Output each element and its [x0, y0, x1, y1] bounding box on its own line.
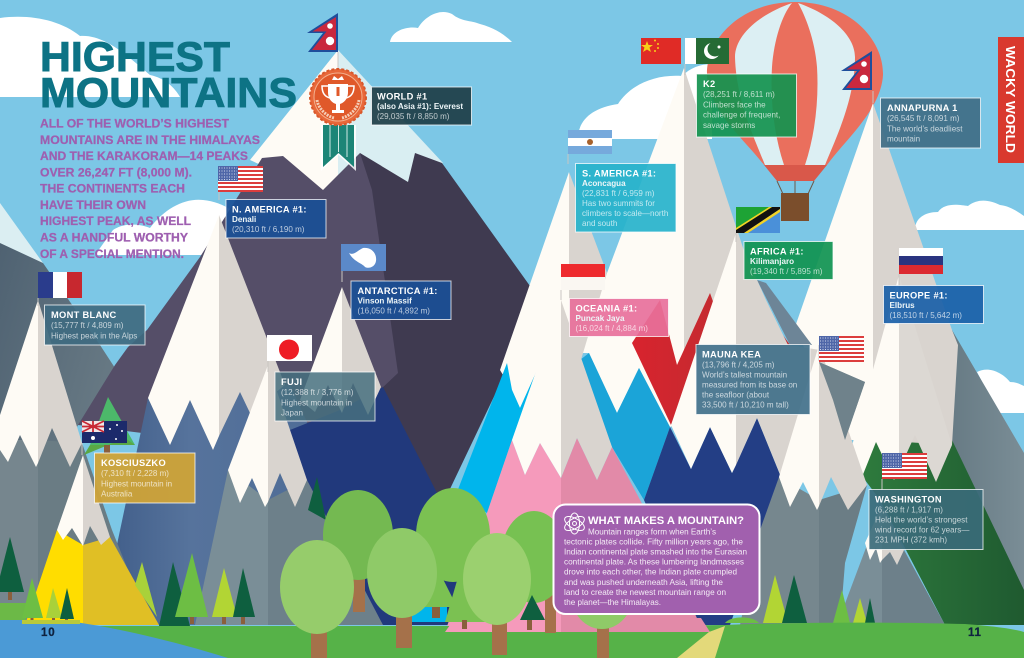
intro text: OVER 26,247 FT (8,000 M). — [40, 166, 192, 180]
icon: trophy medal — [310, 69, 366, 171]
label: K2 — [696, 74, 796, 137]
mountain: Mont Blanc — [0, 300, 150, 625]
label: K2: Climbers face the — [703, 100, 766, 110]
flag poles — [38, 52, 899, 490]
callout: what makes a mountain: continental plate. As these lumbering landmasses — [564, 556, 745, 566]
round trees — [280, 488, 632, 658]
label: Africa Kilimanjaro — [744, 242, 833, 280]
flag: Nepal (Everest) — [307, 13, 338, 52]
label: Kosciuszko — [94, 453, 195, 503]
label: Washington — [869, 490, 983, 550]
label: Africa Kilimanjaro: AFRICA #1: — [750, 246, 804, 256]
label: North America Denali — [226, 200, 326, 238]
label: Washington: 231 MPH (372 kmh) — [875, 536, 947, 544]
label: Kosciuszko: KOSCIUSZKO — [101, 458, 166, 468]
label: Antarctica Vinson Massif: (16,050 ft / 4,892 m) — [358, 306, 430, 316]
label: Oceania Puncak Jaya: OCEANIA #1: — [576, 304, 637, 314]
small tree behind flag — [84, 397, 135, 455]
trees left — [0, 477, 326, 626]
intro text: THE CONTINENTS EACH — [40, 182, 185, 196]
clouds — [0, 12, 1024, 413]
label: Antarctica Vinson Massif: ANTARCTICA #1: — [358, 286, 438, 296]
flag: Pakistan — [685, 38, 729, 64]
label: Europe Elbrus: EUROPE #1: — [890, 290, 948, 300]
label: Washington: Held the world’s strongest — [875, 516, 968, 524]
label: Kosciuszko: Australia — [101, 490, 133, 498]
label: Mauna Kea: 33,500 ft / 10,210 m tall) — [702, 400, 789, 410]
label: K2: challenge of frequent, — [703, 110, 780, 120]
mountain: Aconcagua — [457, 172, 607, 513]
title — [40, 33, 297, 116]
label: South America Aconcagua: (22,831 ft / 6,959 m) — [582, 189, 655, 198]
label: Mont Blanc: Highest peak in the Alps — [51, 332, 137, 340]
label: South America Aconcagua: S. AMERICA #1: — [582, 168, 656, 178]
mountain: Elbrus — [850, 275, 952, 482]
flag: Indonesia — [561, 264, 605, 290]
mountain: Kilimanjaro — [644, 233, 820, 625]
title: MOUNTAINS — [40, 69, 297, 116]
label: Mauna Kea: MAUNA KEA — [702, 350, 761, 360]
mountain: Puncak Jaya — [445, 300, 710, 632]
side tab: wacky world — [998, 37, 1024, 163]
hot air balloon — [707, 2, 883, 221]
mountain: Mauna Kea — [740, 345, 867, 625]
label: Europe Elbrus: Elbrus — [890, 301, 915, 310]
label: North America Denali: N. AMERICA #1: — [232, 204, 307, 214]
intro text: MOUNTAINS ARE IN THE HIMALAYAS — [40, 133, 260, 147]
label: South America Aconcagua: Has two summits for — [582, 199, 655, 208]
label: Africa Kilimanjaro: Kilimanjaro — [750, 257, 794, 266]
flag: Russia — [899, 248, 943, 274]
label: Mont Blanc — [44, 305, 145, 345]
mountain: Washington — [837, 505, 945, 625]
gray sliver and red peaks — [632, 280, 812, 425]
page number 10: 10 — [41, 627, 55, 639]
label: Annapurna: ANNAPURNA 1 — [887, 103, 958, 113]
callout: what makes a mountain: Indian continental plate smashed into the Eurasian — [564, 546, 747, 556]
label: world number one Everest: WORLD #1 — [377, 91, 427, 101]
callout: what makes a mountain: WHAT MAKES A MOUNTAIN? — [588, 515, 744, 527]
intro text: AS A HANDFUL WORTHY — [40, 230, 188, 244]
label: Fuji: Japan — [281, 408, 303, 418]
label: Oceania Puncak Jaya: Puncak Jaya — [576, 314, 625, 323]
label: Washington: WASHINGTON — [875, 494, 942, 504]
intro text: AND THE KARAKORAM—14 PEAKS — [40, 149, 248, 163]
flag: France — [38, 272, 82, 298]
label: South America Aconcagua: and south — [582, 219, 617, 228]
label: Annapurna: The world’s deadliest — [887, 124, 963, 134]
label: Mauna Kea: (13,796 ft / 4,205 m) — [702, 360, 775, 370]
label: Europe Elbrus: (18,510 ft / 5,642 m) — [890, 311, 962, 320]
mountain: Fuji — [195, 365, 383, 625]
page number 11: 11 — [968, 627, 982, 639]
label: Washington: wind record for 62 years— — [874, 526, 970, 534]
label: Kosciuszko: Highest mountain in — [101, 480, 172, 488]
label: Europe Elbrus — [884, 286, 984, 324]
flag: Tanzania — [736, 207, 780, 233]
icon: atom — [562, 513, 587, 534]
mountain: right gray and green range — [850, 330, 1024, 625]
label: South America Aconcagua — [576, 164, 676, 232]
callout: what makes a mountain: the planet—the Himalayas. — [564, 597, 661, 607]
callout: what makes a mountain — [554, 504, 760, 614]
callout: what makes a mountain: Mountain ranges form when Earth’s — [588, 526, 717, 536]
label: Fuji: Highest mountain in — [281, 398, 352, 408]
callout: what makes a mountain: tectonic plates collide. Fifty million years ago, the — [564, 536, 743, 546]
label: Mauna Kea: measured from its base on — [702, 380, 797, 390]
label: Kosciuszko: (7,310 ft / 2,228 m) — [101, 469, 169, 478]
label: world number one Everest: (also Asia #1): Everest — [377, 102, 463, 111]
label: Fuji: FUJI — [281, 377, 302, 387]
label: North America Denali: Denali — [232, 215, 256, 224]
label: South America Aconcagua: climbers to scale—north — [582, 209, 668, 218]
mountain: Annapurna — [795, 103, 958, 445]
title: HIGHEST — [40, 33, 230, 80]
ground — [0, 618, 1024, 658]
label: world number one Everest: (29,035 ft / 8,850 m) — [377, 112, 450, 121]
mountain: K2 — [577, 68, 770, 500]
flag: Japan — [267, 335, 312, 361]
label: Annapurna — [880, 98, 980, 148]
flag: USA (Mauna Kea) — [819, 336, 864, 362]
callout: what makes a mountain: land to create the newest mountain range on — [564, 587, 726, 597]
label: Antarctica Vinson Massif: Vinson Massif — [358, 296, 412, 306]
label: world number one Everest — [372, 87, 472, 125]
label: South America Aconcagua: Aconcagua — [582, 179, 626, 188]
intro text: OF A SPECIAL MENTION. — [40, 247, 184, 261]
label: Mauna Kea: the seafloor (about — [702, 390, 770, 400]
label: Mauna Kea — [696, 344, 810, 414]
flag: Australia — [82, 421, 127, 443]
intro text — [40, 116, 260, 261]
flag: USA (Denali) — [218, 166, 263, 192]
flag: China — [641, 38, 681, 64]
label: Mont Blanc: MONT BLANC — [51, 310, 116, 320]
label: K2: (28,251 ft / 8,611 m) — [703, 90, 775, 99]
label: Africa Kilimanjaro: (19,340 ft / 5,895 m) — [750, 267, 823, 276]
mountain: Vinson Massif — [280, 287, 480, 625]
mountain: Kosciuszko — [25, 455, 159, 625]
intro text: ALL OF THE WORLD’S HIGHEST — [40, 116, 230, 130]
flag: Antarctica — [341, 244, 386, 271]
callout: what makes a mountain: drove into each other, the Indian plate crumpled — [564, 566, 737, 576]
callout: what makes a mountain: and was pushed underneath Asia, lifting the — [564, 577, 723, 587]
label: K2: K2 — [703, 79, 715, 89]
label: Oceania Puncak Jaya: (16,024 ft / 4,884 m) — [576, 324, 648, 333]
label: Antarctica Vinson Massif — [351, 281, 451, 320]
label: Oceania Puncak Jaya — [570, 298, 668, 336]
label: K2: savage storms — [703, 121, 755, 130]
flag: Nepal (Annapurna) — [841, 51, 872, 90]
side tab: wacky world: WACKY WORLD — [1003, 46, 1017, 153]
label: Fuji — [275, 372, 375, 421]
label: North America Denali: (20,310 ft / 6,190 m) — [232, 225, 305, 234]
mountain: Everest — [78, 50, 540, 510]
flag: USA (Washington) — [882, 453, 927, 479]
label: Mauna Kea: World’s tallest mountain — [702, 370, 787, 380]
label: Washington: (6,288 ft / 1,917 m) — [875, 506, 943, 514]
label: Mont Blanc: (15,777 ft / 4,809 m) — [51, 321, 124, 330]
trees right — [725, 575, 875, 623]
flag: Argentina — [568, 130, 612, 154]
label: Fuji: (12,388 ft / 3,776 m) — [281, 388, 354, 397]
intro text: HIGHEST PEAK, AS WELL — [40, 214, 192, 228]
label: Annapurna: (26,545 ft / 8,091 m) — [887, 114, 960, 123]
label: Annapurna: mountain — [887, 134, 920, 144]
intro text: HAVE THEIR OWN — [40, 198, 146, 212]
far left gray mountain — [0, 203, 115, 640]
mountain: Denali — [100, 215, 400, 625]
